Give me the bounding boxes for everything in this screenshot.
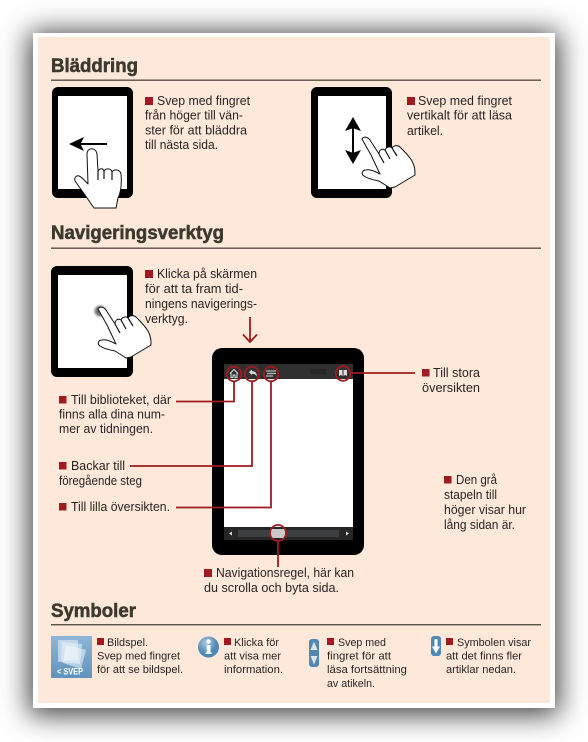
icon: down arrow [431, 636, 441, 656]
label: grey bar: lång sidan är. [444, 518, 515, 532]
label: small overview: Till lilla översikten. [71, 500, 170, 514]
top toolbar [224, 364, 353, 379]
text: slideshow: Bildspel. [107, 637, 148, 649]
panel: swipe vertically [311, 87, 512, 198]
label: grey bar [444, 473, 526, 532]
symbol: slideshow [51, 636, 183, 678]
text: tap the screen: ningens navigerings- [145, 297, 257, 311]
text: swipe vertically: artikel. [407, 124, 443, 138]
label: library [59, 393, 171, 436]
symbol: more articles below [431, 636, 531, 676]
text: swipe horizontally: från höger till vän- [145, 108, 243, 122]
text: swipe horizontally [145, 94, 250, 152]
icon: info [198, 636, 219, 658]
text: tap the screen [145, 267, 257, 326]
text: information: att visa mer [224, 650, 281, 662]
arrow: down to tablet [243, 317, 257, 342]
text: swipe horizontally: Svep med fingret [157, 94, 250, 108]
text: information: Klicka för [234, 637, 279, 649]
label: library: mer av tidningen. [59, 422, 153, 436]
tablet with left arrow and hand [52, 87, 133, 208]
text: swipe vertically [407, 94, 512, 138]
heading: Bläddring: Bläddring [51, 55, 138, 77]
label: navigation ruler: Navigationsregel, här kan [216, 566, 354, 580]
text: swipe to continue: fingret för att [327, 650, 392, 662]
icon: SVEP: < SVEP [57, 666, 84, 678]
text: swipe horizontally: till nästa sida. [145, 138, 218, 152]
heading: Navigeringsverktyg: Navigeringsverktyg [51, 222, 224, 244]
large tablet with navigation tools [212, 348, 364, 555]
text: information: information. [224, 664, 283, 676]
label: big overview: översikten [422, 381, 480, 395]
label: big overview: Till stora [433, 366, 480, 380]
text: swipe vertically: vertikalt för att läsa [407, 108, 512, 122]
symbol: information [198, 636, 283, 676]
label: navigation ruler [204, 566, 354, 595]
text: swipe to continue: Svep med [338, 637, 386, 649]
label: back: föregående steg [59, 474, 142, 488]
label: library: finns alla dina num- [59, 408, 165, 422]
text: slideshow: Svep med fingret [97, 650, 181, 662]
panel: swipe horizontally [52, 87, 250, 208]
label: grey bar: höger visar hur [444, 503, 526, 517]
text: tap the screen: verktyg. [145, 312, 188, 326]
text: swipe vertically: Svep med fingret [418, 94, 512, 108]
heading: Symboler: Symboler [51, 600, 136, 622]
label: library: Till biblioteket, där [71, 393, 171, 407]
icon: up and down arrows [309, 639, 319, 667]
text: information [224, 637, 283, 676]
text: swipe to continue [327, 637, 407, 690]
text: slideshow: för att se bildspel. [97, 664, 183, 676]
text: more articles below: att det finns fler [446, 650, 522, 662]
text: tap the screen: Klicka på skärmen [157, 267, 257, 281]
label: back [59, 459, 142, 488]
text: more articles below: artiklar nedan. [446, 664, 516, 676]
bottom navigation bar [224, 527, 353, 540]
text: swipe horizontally: ster för att bläddra [145, 124, 247, 138]
text: more articles below [446, 637, 531, 676]
label: grey bar: Den grå [456, 473, 497, 487]
text: slideshow [97, 637, 183, 676]
label: big overview [422, 366, 480, 395]
text: swipe to continue: av atikeln. [327, 678, 375, 690]
callout lines [130, 366, 415, 567]
panel: tap the screen [51, 266, 257, 377]
text: swipe to continue: läsa fortsättning [327, 664, 407, 676]
tablet with tap hand [51, 266, 151, 377]
symbol: swipe to continue [309, 637, 407, 690]
tablet with vertical arrow and hand [311, 87, 415, 198]
label: back: Backar till [71, 459, 125, 473]
label: grey bar: stapeln till [444, 488, 497, 502]
text: more articles below: Symbolen visar [457, 637, 531, 649]
text: tap the screen: för att ta fram tid- [145, 282, 243, 296]
label: navigation ruler: du scrolla och byta sida. [204, 581, 339, 595]
